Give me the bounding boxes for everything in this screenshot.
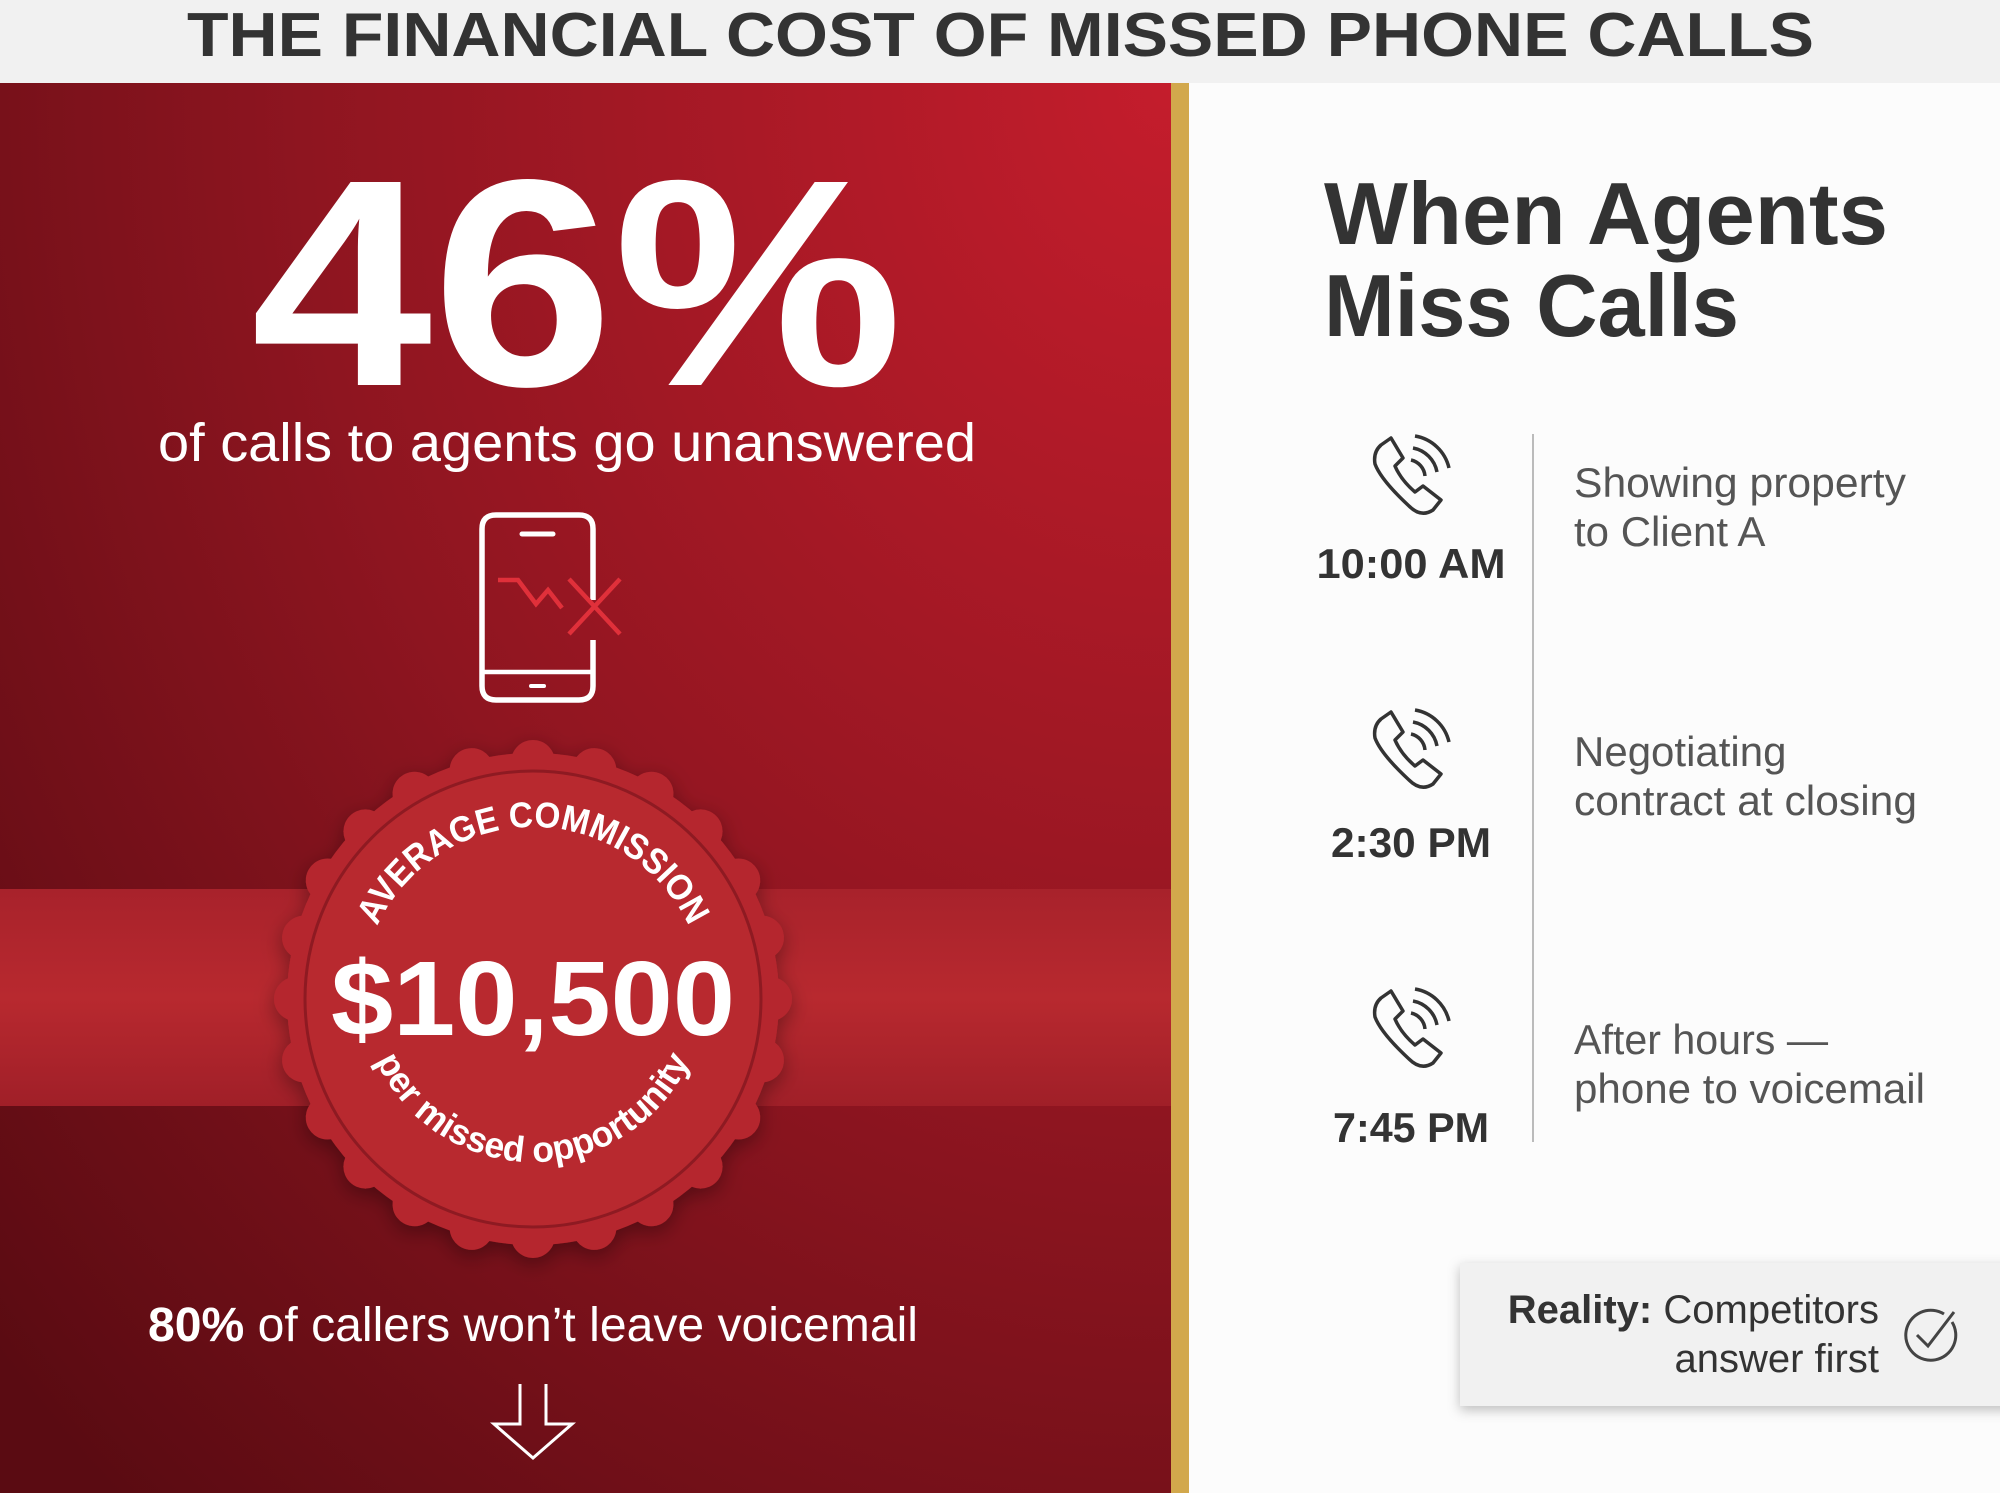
description: Showing property — [1574, 459, 1906, 506]
callout: reality: answer first — [1674, 1337, 1879, 1381]
seal bottom arc text: per missed opportunity — [370, 1052, 691, 1168]
icon: phone ringing — [1375, 436, 1449, 513]
heading: when agents miss calls: Miss Calls — [1324, 256, 1739, 355]
title bar — [0, 0, 2000, 83]
panel: red statistics — [0, 83, 1171, 1493]
description: phone to voicemail — [1574, 1065, 1925, 1112]
callout: reality: Reality: Competitors — [1508, 1288, 1879, 1332]
seal amount: $10,500 — [331, 940, 735, 1058]
time: 10:00 AM — [1316, 540, 1506, 587]
gold divider — [1171, 83, 1189, 1493]
description: Negotiating — [1574, 728, 1786, 775]
time: 2:30 PM — [1331, 819, 1491, 866]
arrow: down — [494, 1384, 572, 1458]
timeline line — [1532, 434, 1534, 1142]
description: contract at closing — [1574, 777, 1917, 824]
subtitle: unanswered calls: of calls to agents go unanswered — [158, 413, 976, 473]
seal top arc text: AVERAGE COMMISSION — [360, 802, 710, 926]
big stat 46%: 46% — [251, 118, 903, 448]
icon: check circle — [1906, 1310, 1956, 1360]
icon: phone ringing — [1375, 710, 1449, 787]
heading: when agents miss calls — [1324, 164, 1888, 355]
seal: average commission — [264, 738, 802, 1270]
ribbon band — [0, 889, 1171, 1106]
description: to Client A — [1574, 508, 1765, 555]
title: THE FINANCIAL COST OF MISSED PHONE CALLS — [187, 1, 1814, 70]
voicemail stat: 80% of callers won’t leave voicemail — [148, 1299, 918, 1352]
timeline item 1 — [1316, 436, 1906, 587]
description: After hours — — [1574, 1016, 1828, 1063]
timeline item 2 — [1331, 710, 1917, 866]
timeline item 3 — [1333, 989, 1925, 1151]
panel: right timeline — [1189, 83, 2000, 1493]
icon: phone ringing — [1375, 989, 1449, 1066]
time: 7:45 PM — [1333, 1104, 1489, 1151]
callout: reality — [1460, 1263, 2000, 1406]
icon: broken phone — [482, 515, 620, 700]
heading: when agents miss calls: When Agents — [1324, 164, 1888, 263]
